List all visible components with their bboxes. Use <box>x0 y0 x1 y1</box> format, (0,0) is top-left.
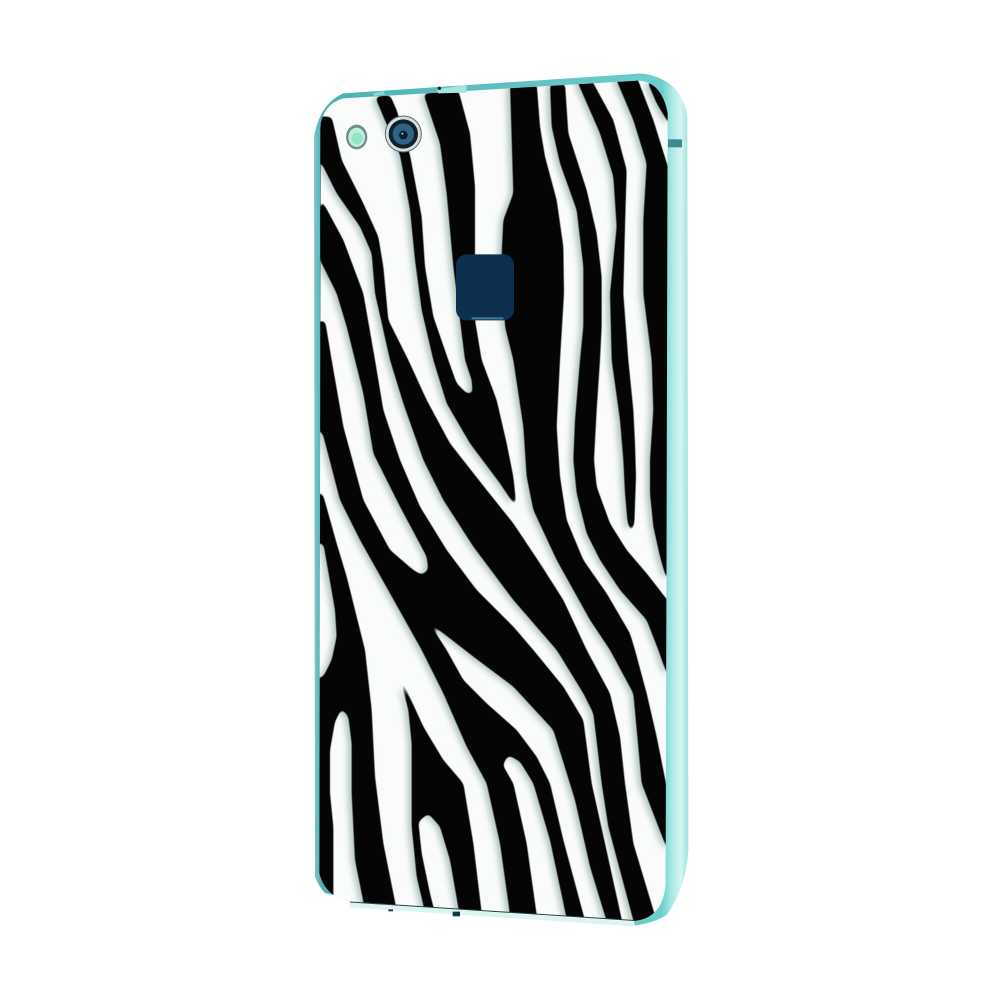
stripe: right edge <box>615 77 670 582</box>
zebra back panel <box>319 80 668 921</box>
stripe: right tapering <box>577 80 636 533</box>
stripe: lower left <box>319 493 396 904</box>
phone case frame <box>310 73 688 940</box>
zebra phone case illustration <box>314 74 688 926</box>
camera flash <box>346 125 367 149</box>
stripe: corner diagonal <box>313 117 658 927</box>
stripe: large left mass <box>313 202 623 927</box>
bottom edge details <box>350 902 637 921</box>
fingerprint sensor <box>456 254 514 320</box>
stripe: top right corner <box>647 80 672 128</box>
stripe: right long <box>550 83 670 683</box>
side button <box>668 139 682 147</box>
stripe: central wide <box>502 83 670 857</box>
top edge port <box>373 85 467 96</box>
stripe: camera to wedge <box>375 90 517 508</box>
stripe: lower wedge <box>398 686 482 910</box>
camera lens <box>385 116 421 152</box>
